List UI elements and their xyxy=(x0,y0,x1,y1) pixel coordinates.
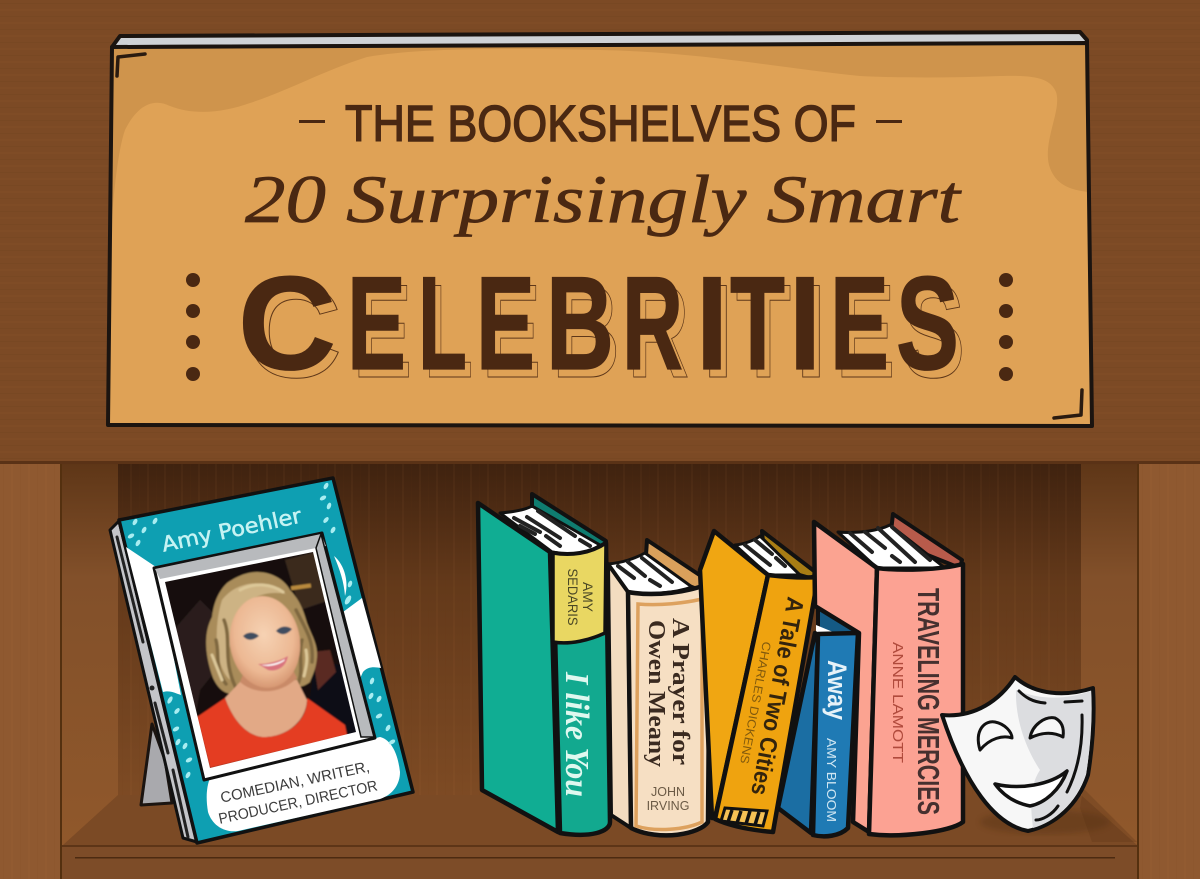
spine text: A Tale of Two Cities xyxy=(745,595,809,797)
heading: the bookshelves of: THE BOOKSHELVES OF xyxy=(345,95,856,152)
title sign xyxy=(108,32,1092,426)
heading: celebrities: I xyxy=(696,250,728,398)
book: Away by Amy Bloom: AMY BLOOM xyxy=(824,738,839,822)
heading: celebrities: S xyxy=(902,258,965,406)
book: A Prayer for Owen Meany by John Irving: IRVING xyxy=(647,799,689,813)
spine text: A Prayer for xyxy=(667,618,693,765)
role caption: PRODUCER, DIRECTOR xyxy=(217,777,379,828)
book: I Like You by Amy Sedaris: I like You xyxy=(558,671,595,797)
heading: celebrities: B xyxy=(546,250,614,398)
book: I Like You by Amy Sedaris: SEDARIS xyxy=(565,568,581,626)
teal dot pattern xyxy=(127,482,396,779)
icon: comedy mask xyxy=(942,677,1094,831)
spine text: Owen Meany xyxy=(643,620,669,767)
decorative dots xyxy=(186,273,1013,381)
spine label xyxy=(721,808,767,826)
icon: shelf shadow under mask xyxy=(980,810,1110,834)
heading: celebrities: T xyxy=(736,258,791,406)
heading: celebrities: E xyxy=(347,250,406,398)
portrait photo xyxy=(165,552,356,768)
picture frame: Amy Poehler xyxy=(110,478,413,843)
book: Away by Amy Bloom xyxy=(778,607,858,836)
book: A Prayer for Owen Meany by John Irving xyxy=(608,540,710,835)
frame front xyxy=(119,478,413,843)
heading: celebrities: I xyxy=(702,258,734,406)
book: A Tale of Two Cities by Charles Dickens: CHARLES DICKENS xyxy=(737,640,774,765)
heading: celebrities: I xyxy=(795,258,827,406)
book: Traveling Mercies by Anne Lamott: ANNE LAMOTT xyxy=(889,642,906,763)
heading: celebrities: S xyxy=(896,250,959,398)
heading: celebrities: E xyxy=(353,258,412,406)
spine text: AMY xyxy=(580,582,596,613)
heading: celebrities: L xyxy=(418,250,467,398)
heading: 20 surprisingly smart: 20 Surprisingly Smart xyxy=(245,161,962,237)
heading: celebrities xyxy=(238,250,965,406)
heading: celebrities: T xyxy=(730,250,785,398)
name: Amy Poehler xyxy=(160,504,304,557)
spine text: Away xyxy=(822,660,852,720)
heading: celebrities: B xyxy=(552,258,620,406)
book: I Like You by Amy Sedaris xyxy=(478,494,610,835)
heading: celebrities: C xyxy=(238,250,336,398)
spine text xyxy=(643,618,693,767)
heading: celebrities: R xyxy=(628,258,689,406)
book: A Tale of Two Cities by Charles Dickens xyxy=(700,531,818,832)
heading: celebrities: C xyxy=(244,258,342,406)
heading: celebrities: E xyxy=(830,250,889,398)
heading: celebrities: E xyxy=(482,258,541,406)
book: A Prayer for Owen Meany by John Irving: JOHN xyxy=(651,785,685,799)
role caption: COMEDIAN, WRITER, xyxy=(219,758,371,807)
heading: celebrities: E xyxy=(476,250,535,398)
heading: celebrities: L xyxy=(424,258,473,406)
heading: celebrities: E xyxy=(836,258,895,406)
frame stand xyxy=(141,724,172,805)
frame spine xyxy=(110,521,197,842)
heading: celebrities: I xyxy=(789,250,821,398)
book: Traveling Mercies by Anne Lamott xyxy=(814,514,963,835)
heading: celebrities: R xyxy=(622,250,683,398)
frame inner bevel xyxy=(154,533,375,780)
